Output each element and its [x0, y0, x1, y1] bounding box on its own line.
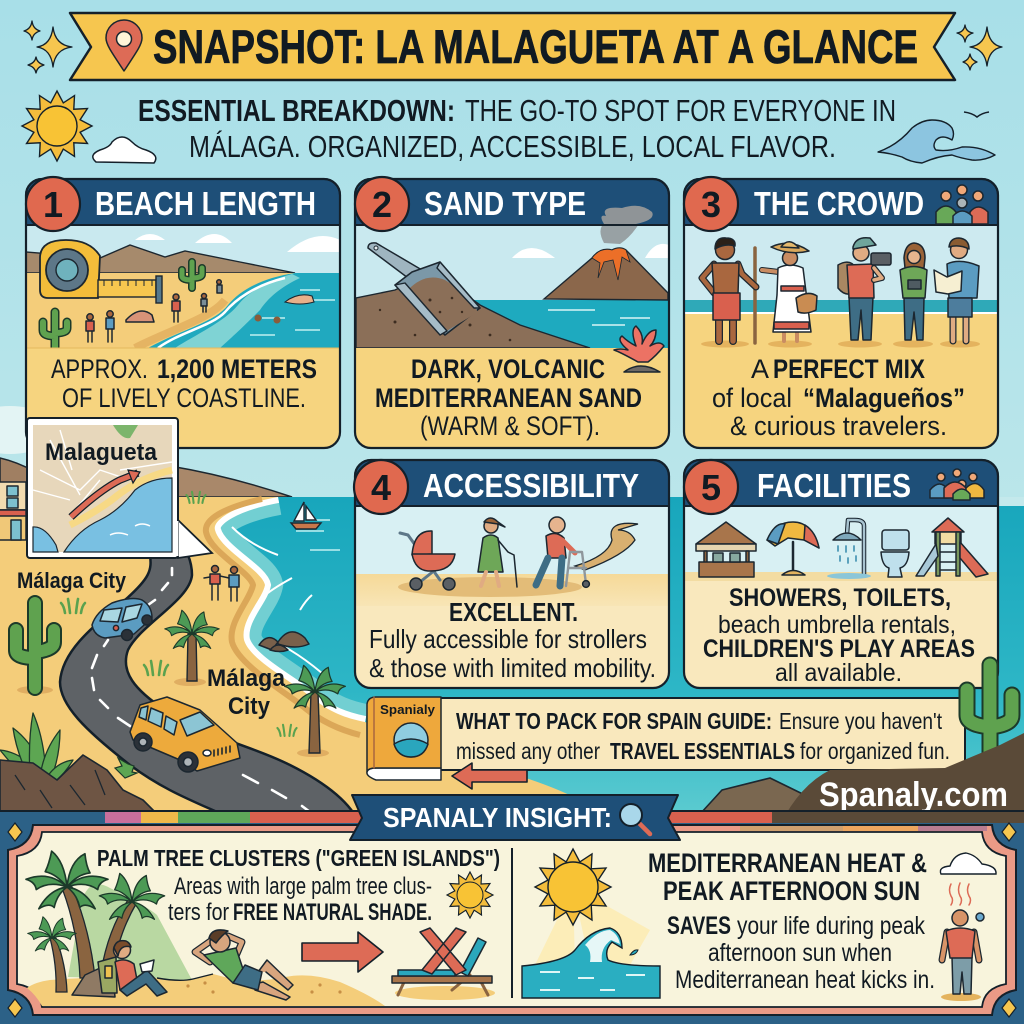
icon: crowd — [936, 185, 988, 224]
person: woman with camera — [900, 243, 927, 340]
number badge: 5 — [701, 467, 721, 508]
right insight text: your life during peak — [737, 912, 925, 940]
number badge — [684, 460, 738, 514]
body text: of local — [712, 383, 792, 413]
body text: SHOWERS, TOILETS, — [729, 584, 951, 612]
right insight text: afternoon sun when — [708, 939, 892, 967]
coastal scene background — [0, 406, 1024, 817]
figure: reclining man — [195, 930, 293, 1000]
body text: & those with limited mobility. — [369, 653, 656, 683]
icon: shower — [827, 520, 871, 579]
road — [60, 555, 360, 825]
right insight text: PEAK AFTERNOON SUN — [663, 876, 920, 906]
number badge — [355, 177, 409, 231]
arrow — [452, 763, 527, 789]
body text: “Malagueños” — [803, 383, 965, 413]
guide text: missed any other — [456, 738, 600, 764]
right cactus — [967, 665, 1012, 765]
subtitle: ESSENTIAL BREAKDOWN: — [138, 93, 455, 128]
title banner — [70, 13, 955, 80]
guide text: Ensure you haven't — [779, 708, 943, 734]
label: Málaga City, upper: Málaga City — [17, 568, 127, 593]
illustration: five beachgoers — [684, 225, 998, 348]
right insight text: SAVES — [667, 912, 731, 940]
subtitle: THE GO-TO SPOT FOR EVERYONE IN — [465, 93, 896, 128]
corner ornaments — [8, 823, 1016, 1017]
icon: stroller — [400, 531, 455, 590]
body text: & curious travelers. — [730, 411, 947, 441]
illustration: palm shade beach — [26, 851, 385, 1006]
right insight text: MEDITERRANEAN HEAT & — [648, 848, 927, 878]
banner: Spanaly insight — [350, 795, 680, 840]
body text — [712, 354, 965, 441]
person: local man with staff — [702, 238, 756, 343]
yellow car — [130, 697, 240, 772]
illustration: volcano and sand scoop — [355, 225, 669, 348]
panel: 4 accessibility — [354, 460, 669, 688]
icon: right sparkles — [957, 25, 1002, 70]
number badge — [26, 177, 80, 231]
body text — [703, 584, 975, 687]
icon: map pin — [106, 20, 142, 71]
body text — [369, 597, 656, 683]
body text: CHILDREN'S PLAY AREAS — [703, 635, 975, 663]
beach figures — [204, 566, 239, 601]
left insight text: PALM TREE CLUSTERS ("GREEN ISLANDS") — [97, 845, 500, 871]
label: Málaga City, lower: City — [228, 693, 271, 720]
body text: all available. — [775, 659, 902, 687]
body text: beach umbrella rentals, — [718, 611, 956, 639]
body text: A — [751, 354, 769, 384]
number badge: 1 — [43, 184, 63, 225]
arrow — [302, 932, 383, 972]
person: man with map — [934, 238, 979, 341]
header bar — [355, 460, 669, 506]
map — [33, 425, 172, 552]
icon: small sun — [447, 872, 493, 918]
icon: left sparkles — [24, 21, 72, 73]
body text: 1,200 METERS — [157, 354, 317, 384]
header bar — [684, 179, 998, 225]
header bar — [355, 179, 669, 225]
building — [0, 482, 26, 540]
website label: Spanaly.com — [819, 776, 1008, 814]
blue car — [92, 599, 152, 640]
label: Málaga City, lower — [207, 665, 286, 720]
illustration: accessible path — [355, 506, 669, 614]
map label: Malagueta — [45, 439, 158, 466]
right insight text: Mediterranean heat kicks in. — [675, 966, 935, 994]
left cactus — [16, 603, 54, 694]
callout: packing guide — [367, 697, 965, 789]
heading: BEACH LENGTH — [95, 185, 316, 222]
number badge — [354, 460, 408, 514]
icon: man with walker — [536, 517, 589, 587]
body text: MEDITERRANEAN SAND — [375, 383, 642, 413]
body text: (WARM & SOFT). — [420, 411, 600, 441]
header bar — [684, 460, 998, 506]
subtitle: MÁLAGA. ORGANIZED, ACCESSIBLE, LOCAL FLAVOR. — [189, 129, 836, 164]
palm trees and grass — [61, 492, 345, 757]
icon: woman with cane — [478, 518, 517, 587]
smoke — [600, 206, 653, 244]
header bar — [26, 179, 340, 225]
subtitle — [138, 93, 896, 164]
heading: THE CROWD — [754, 185, 924, 222]
icon: umbrella — [767, 522, 819, 575]
right insight text — [648, 848, 935, 994]
number badge: 2 — [372, 184, 392, 225]
person: woman with sun hat — [762, 242, 817, 341]
left insight text: FREE NATURAL SHADE. — [233, 899, 432, 926]
agave and rocks, lower left — [0, 713, 155, 812]
icon: overheated person — [941, 883, 984, 1001]
panel: Spanaly insight — [0, 795, 1024, 1024]
icon: wave and bird — [878, 112, 995, 163]
panel: 3 the crowd — [684, 177, 998, 448]
number badge: 3 — [701, 184, 721, 225]
guide text: WHAT TO PACK FOR SPAIN GUIDE: — [456, 708, 772, 734]
number badge: 4 — [371, 467, 391, 508]
icon: playground — [916, 518, 988, 577]
icon: small cloud — [940, 853, 996, 874]
smoke over header — [601, 206, 653, 224]
number badge — [684, 177, 738, 231]
left insight text — [97, 845, 500, 926]
icon: crossed-out sun lounger — [392, 928, 495, 1000]
banner: Spanaly insight: SPANALY INSIGHT: — [383, 802, 612, 833]
body text: PERFECT MIX — [773, 354, 925, 384]
figure: person reading under palms — [72, 941, 167, 997]
frame — [8, 825, 1016, 1015]
rocks and website label area — [690, 733, 1024, 825]
body text: EXCELLENT. — [449, 597, 578, 627]
illustration: big sun with wave — [522, 849, 660, 998]
heading: SAND TYPE — [424, 185, 586, 222]
icon: toilet — [881, 530, 909, 577]
panel: 1 beach length — [26, 177, 340, 448]
body text — [375, 354, 642, 441]
icon: guide book — [367, 697, 441, 780]
left insight text: Areas with large palm tree clus- — [174, 873, 432, 900]
coastal rocks — [259, 632, 309, 652]
icon: crowd, facilities — [930, 469, 984, 500]
panel: 2 sand type — [355, 177, 669, 448]
icon: coral — [614, 326, 664, 372]
illustration: beach with tape measure — [26, 225, 340, 348]
icon: sun — [22, 91, 92, 161]
heading: ACCESSIBILITY — [423, 467, 639, 504]
left insight text: ters for — [168, 899, 229, 926]
guide text: for organized fun. — [800, 738, 950, 764]
guide text — [456, 708, 950, 764]
icon: guide book: Spanialy — [380, 703, 435, 717]
body text: DARK, VOLCANIC — [411, 354, 605, 384]
shoreline waves and boat — [232, 502, 340, 680]
panel: 5 facilities — [684, 460, 998, 688]
guide text: TRAVEL ESSENTIALS — [610, 738, 795, 764]
body text — [51, 354, 317, 413]
icon: cloud — [93, 137, 156, 163]
icon: magnifying glass — [620, 804, 650, 834]
person: photographer — [838, 238, 891, 340]
icon: kiosk — [696, 522, 756, 577]
heading: FACILITIES — [757, 467, 911, 504]
body text: APPROX. — [51, 354, 148, 384]
label: Málaga City, lower: Málaga — [207, 665, 286, 692]
callout: Malagueta map — [27, 418, 212, 558]
illustration: beach facilities — [684, 506, 998, 584]
body text: OF LIVELY COASTLINE. — [62, 383, 306, 413]
body text: Fully accessible for strollers — [369, 624, 647, 654]
